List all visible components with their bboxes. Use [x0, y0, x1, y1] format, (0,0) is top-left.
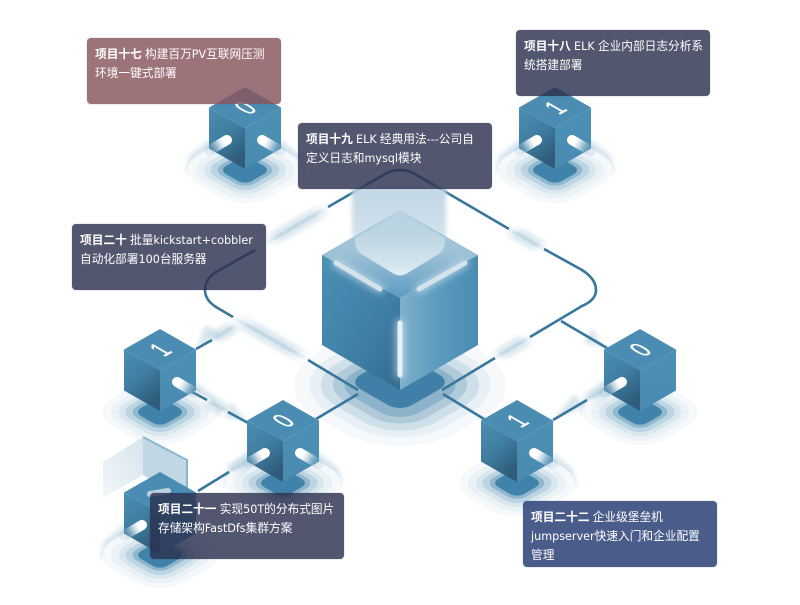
cube: right	[604, 329, 676, 411]
panel: project 20: 项目二十 批量kickstart+cobbler	[80, 234, 253, 247]
panel: project 17: 环境一键式部署	[95, 67, 177, 80]
solid connector lines	[177, 170, 607, 491]
cube: project 18	[519, 87, 591, 169]
glowing bars	[336, 263, 465, 375]
cube: right: 0	[623, 340, 659, 361]
panel: project 21: 项目二十一 实现50T的分布式图片	[158, 503, 334, 516]
panel: project 18: 统搭建部署	[524, 59, 582, 72]
cube: project 18: 1	[538, 98, 574, 119]
cube: middle lower-left	[247, 400, 319, 482]
panel: project 17: 项目十七 构建百万PV互联网压测	[95, 48, 265, 61]
cube: project 17: 0	[228, 98, 264, 119]
panel: project 20: 自动化部署100台服务器	[80, 253, 207, 266]
cube: project 20: 1	[143, 340, 179, 361]
panel: project 19: 定义日志和mysql模块	[306, 152, 421, 165]
cube: project 17	[209, 87, 281, 169]
panel: project 19	[298, 123, 492, 189]
cube: project 21	[124, 472, 196, 554]
cube: middle lower-left: 0	[266, 411, 302, 432]
pale connector beams	[207, 207, 622, 472]
pale glow on top face	[355, 212, 445, 276]
panel: project 18	[516, 30, 710, 96]
panel: project 18: 项目十八 ELK 企业内部日志分析系	[524, 40, 703, 53]
panel: project 22: 项目二十二 企业级堡垒机	[531, 511, 663, 524]
panel: project 22	[523, 501, 717, 567]
center cube	[322, 188, 478, 390]
cube: project 22: 1	[500, 411, 536, 432]
pale fans at cube corners	[197, 325, 604, 422]
panel: project 22: jumpserver快速入门和企业配置	[531, 530, 700, 543]
center platform rings	[261, 305, 539, 465]
cube: project 20	[124, 329, 196, 411]
panel: project 22: 管理	[531, 549, 554, 562]
panel: project 21	[150, 493, 344, 559]
cube: project 22	[481, 400, 553, 482]
panel: project 17	[87, 38, 281, 104]
panel: project 21: 存储架构FastDfs集群方案	[158, 522, 292, 535]
icon: monitor behind lower-left cube	[103, 437, 187, 500]
panel: project 19: 项目十九 ELK 经典用法---公司自	[306, 133, 474, 146]
panel: project 20	[72, 224, 266, 290]
rings under small cubes	[87, 128, 713, 597]
light pillar behind cube	[352, 188, 446, 238]
